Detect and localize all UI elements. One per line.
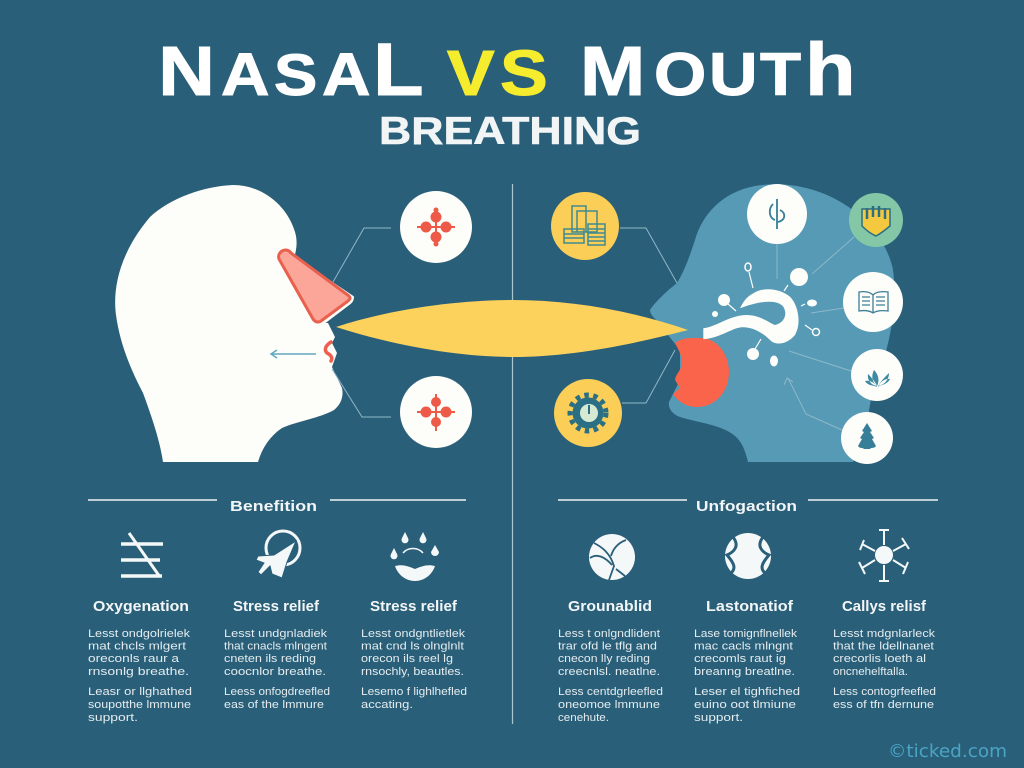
title: h [805,28,856,111]
watermark: ©ticked.com [888,741,1007,762]
icon: cracked ball [589,534,635,580]
icon: rocket [256,531,300,578]
icon: oxygenation [121,533,163,577]
column: stress relief 1: cneten ils reding [224,653,316,665]
column: stress relief 1: Stress relief [233,598,320,615]
column: groundablid: creecnlsl. neatlne. [558,666,660,678]
section: nasal benefits [88,498,467,724]
column: oxygenation: Oxygenation [93,598,189,615]
column: oxygenation: Lesst ondgolrielek [88,628,191,640]
column: groundablid: Grounablid [568,598,652,615]
icon: gear [554,379,622,447]
column: stress relief 2: orecon ils reel lg [361,653,453,665]
icon: open book [843,272,903,332]
column: lastonatiof: support. [694,712,743,724]
column: oxygenation: mat chcls mlgert [88,640,186,652]
airflow lens [336,300,688,357]
title: V [447,38,495,109]
nasal icon: bottom circle [400,376,472,448]
column: groundablid: Less t onlgndlident [558,628,660,640]
mouth head silhouette [650,184,894,462]
nose highlight [279,250,350,322]
column: callys relisf: Lesst mdgnlarleck [833,628,936,640]
column: stress relief 2: mat cnd ls olnglnlt [361,640,464,652]
column: lastonatiof: Lase tomignflnellek [694,628,798,640]
column: lastonatiof: mac cacls mlngnt [694,640,793,652]
column: oxygenation: rnsonlg breathe. [88,666,189,678]
title: L [373,28,424,111]
column: stress relief 1: Lesst undgnladiek [224,628,328,640]
column: stress relief 1: that cnacls mlngent [224,640,327,652]
inhale arrow [271,350,316,358]
icon: leaf [851,349,903,401]
column: stress relief 1 [224,598,330,711]
column: groundablid [558,598,663,724]
icon: tree [841,412,893,464]
icon: documents stack [551,192,619,260]
icon: droplets and lips [390,532,439,581]
nose halo [277,249,353,326]
column: stress relief 2: Lesemo f lighlhefled [361,686,467,698]
column: oxygenation: Leasr or llghathed [88,686,192,698]
column: callys relisf: Callys relisf [842,598,927,615]
column: callys relisf: ess of tfn dernune [833,699,934,711]
center divider [512,184,514,724]
nasal head silhouette [115,185,353,462]
column: groundablid: cnecon lly reding [558,653,650,665]
column: stress relief 2 [361,598,467,711]
section: mouth unfogaction [558,498,938,724]
column: callys relisf [833,598,936,711]
column: lastonatiof: crecomls raut ig [694,653,786,665]
column: groundablid: Less centdgrleefled [558,686,663,698]
column: callys relisf: Less contogrfeefled [833,686,936,698]
column: lastonatiof: breanng breatlne. [694,666,795,678]
column: lastonatiof: Leser el tighfiched [694,686,800,698]
section heading: Unfogaction [696,498,797,515]
column: lastonatiof: euino oot tlmiune [694,699,796,711]
airway curl [703,263,820,366]
column: stress relief 1: eas of the lmmure [224,699,324,711]
icon: white circle symbol [747,184,807,244]
title: A [221,41,270,108]
open mouth [673,338,729,407]
column: stress relief 1: Leess onfogdreefled [224,686,330,698]
title [158,28,856,153]
section heading: Benefition [230,498,317,515]
column: stress relief 1: coocnlor breathe. [224,666,326,678]
column: oxygenation [88,598,192,724]
mouth connector lines [620,228,854,430]
column: oxygenation: soupotthe lmmune [88,699,191,711]
title: M [580,32,645,110]
icon: radial node [859,530,909,581]
column: callys relisf: oncnehelftalla. [833,666,908,678]
column: groundablid: oneomoe lmmune [558,699,660,711]
column: stress relief 2: rnsochly, beautles. [361,666,464,678]
column: stress relief 2: Stress relief [370,598,458,615]
column: lastonatiof: Lastonatiof [706,598,794,615]
nasal connector lines [332,228,391,417]
column: stress relief 2: accating. [361,699,413,711]
title: T [760,41,801,108]
title: O [654,41,706,108]
column: groundablid: cenehute. [558,712,609,724]
lips mark [325,342,332,361]
column: stress relief 2: Lesst ondgntlietlek [361,628,466,640]
title: N [158,32,215,110]
column: groundablid: trar ofd le tflg and [558,640,657,652]
column: oxygenation: oreconls raur a [88,653,180,665]
title: BREATHING [379,110,641,153]
column: callys relisf: that the ldellnanet [833,640,934,652]
nasal icon: top circle [400,191,472,263]
title: U [709,41,757,108]
title: S [274,43,317,108]
column: lastonatiof [694,598,800,724]
column: callys relisf: crecorlis loeth al [833,653,926,665]
icon: baseball [725,533,771,579]
icon: green hand shield [849,193,903,247]
title: S [500,38,548,109]
column: oxygenation: support. [88,712,138,724]
title: A [322,41,371,108]
